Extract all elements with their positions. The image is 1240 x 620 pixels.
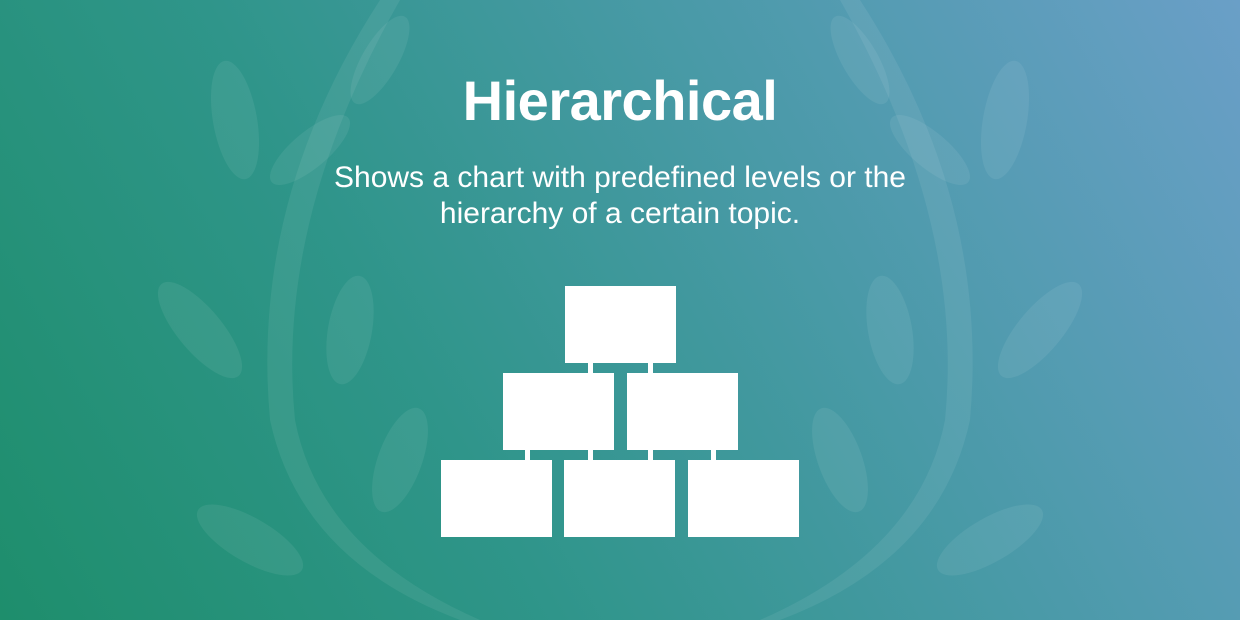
- subtitle: hierarchy of a certain topic.: [440, 197, 800, 230]
- hierarchy pyramid icon: [441, 286, 799, 537]
- middle boxes: [503, 373, 614, 450]
- title: Hierarchical: [463, 69, 777, 132]
- subtitle: [334, 161, 906, 230]
- top box: [565, 286, 676, 363]
- connectors: [588, 363, 593, 373]
- subtitle: Shows a chart with predefined levels or the: [334, 161, 906, 194]
- bottom boxes: [441, 460, 552, 537]
